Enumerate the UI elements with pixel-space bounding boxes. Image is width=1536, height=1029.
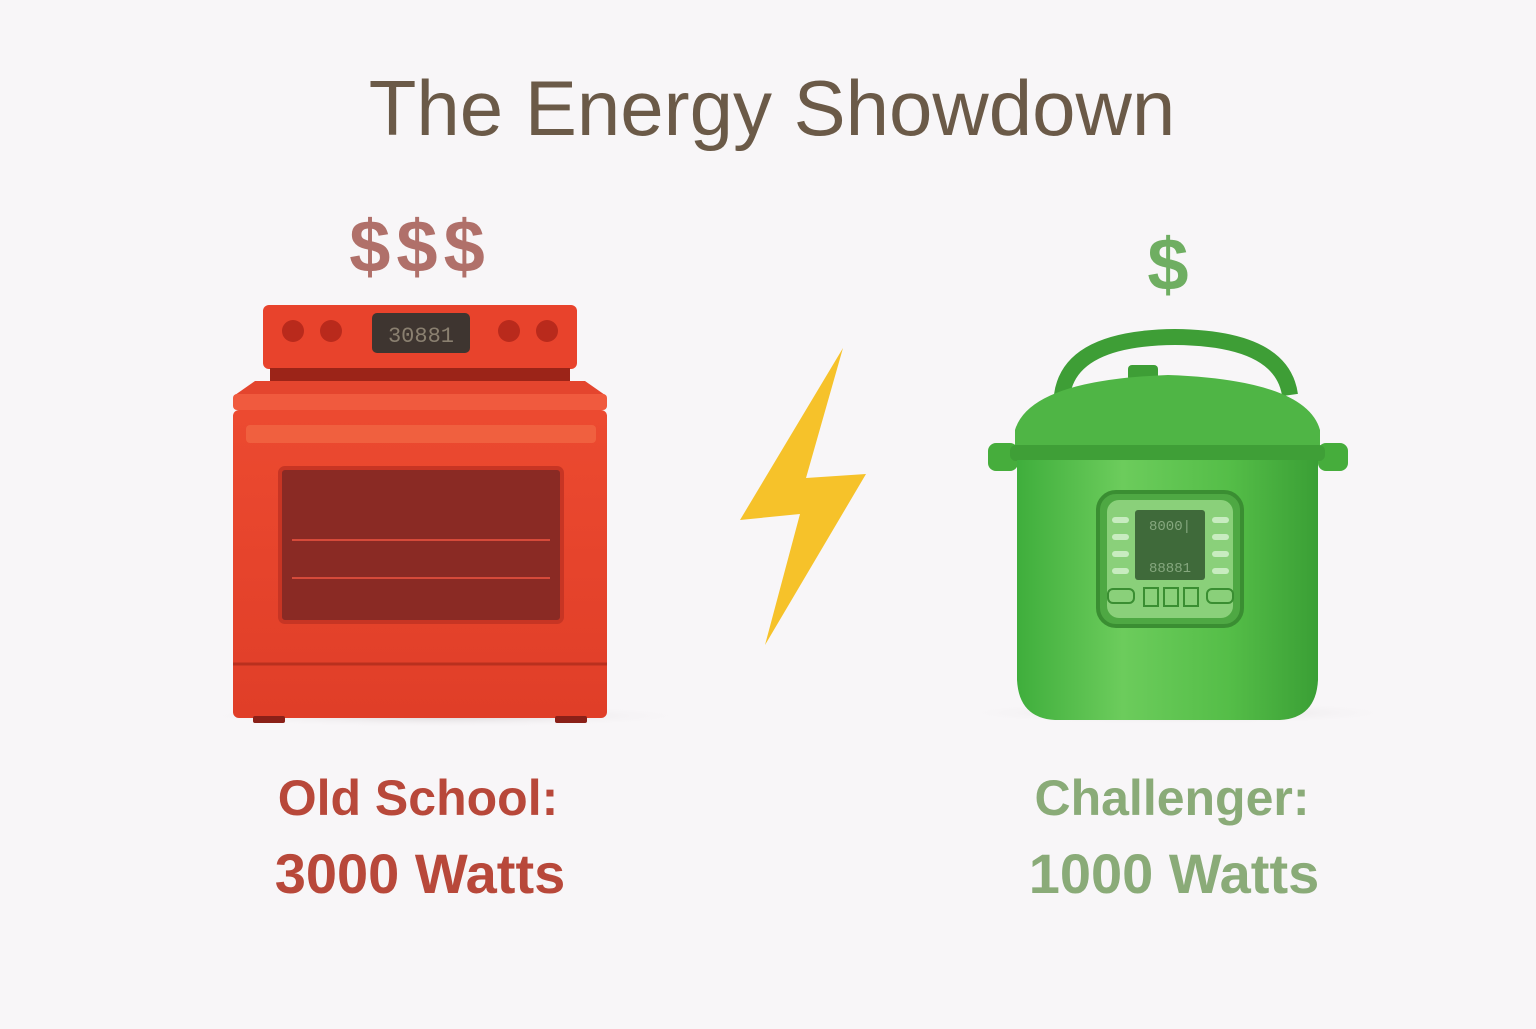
label: challenger: Challenger: — [1034, 770, 1310, 826]
stove — [190, 305, 700, 728]
pressure cooker: 88881 — [1149, 561, 1191, 577]
pressure cooker — [953, 337, 1403, 725]
label: challenger — [1029, 770, 1319, 905]
label: old school: 3000 Watts — [275, 842, 565, 905]
pressure cooker: 8000| — [1149, 519, 1191, 535]
title: The Energy Showdown — [369, 64, 1175, 152]
label: challenger: 1000 Watts — [1029, 842, 1319, 905]
stove: 30881 — [388, 324, 454, 349]
dollar signs: expensive: $$$ — [349, 205, 491, 288]
icon: lightning bolt — [740, 348, 866, 645]
dollar sign: cheap: $ — [1147, 223, 1189, 306]
label: old school: Old School: — [278, 770, 558, 826]
label: old school — [275, 770, 565, 905]
